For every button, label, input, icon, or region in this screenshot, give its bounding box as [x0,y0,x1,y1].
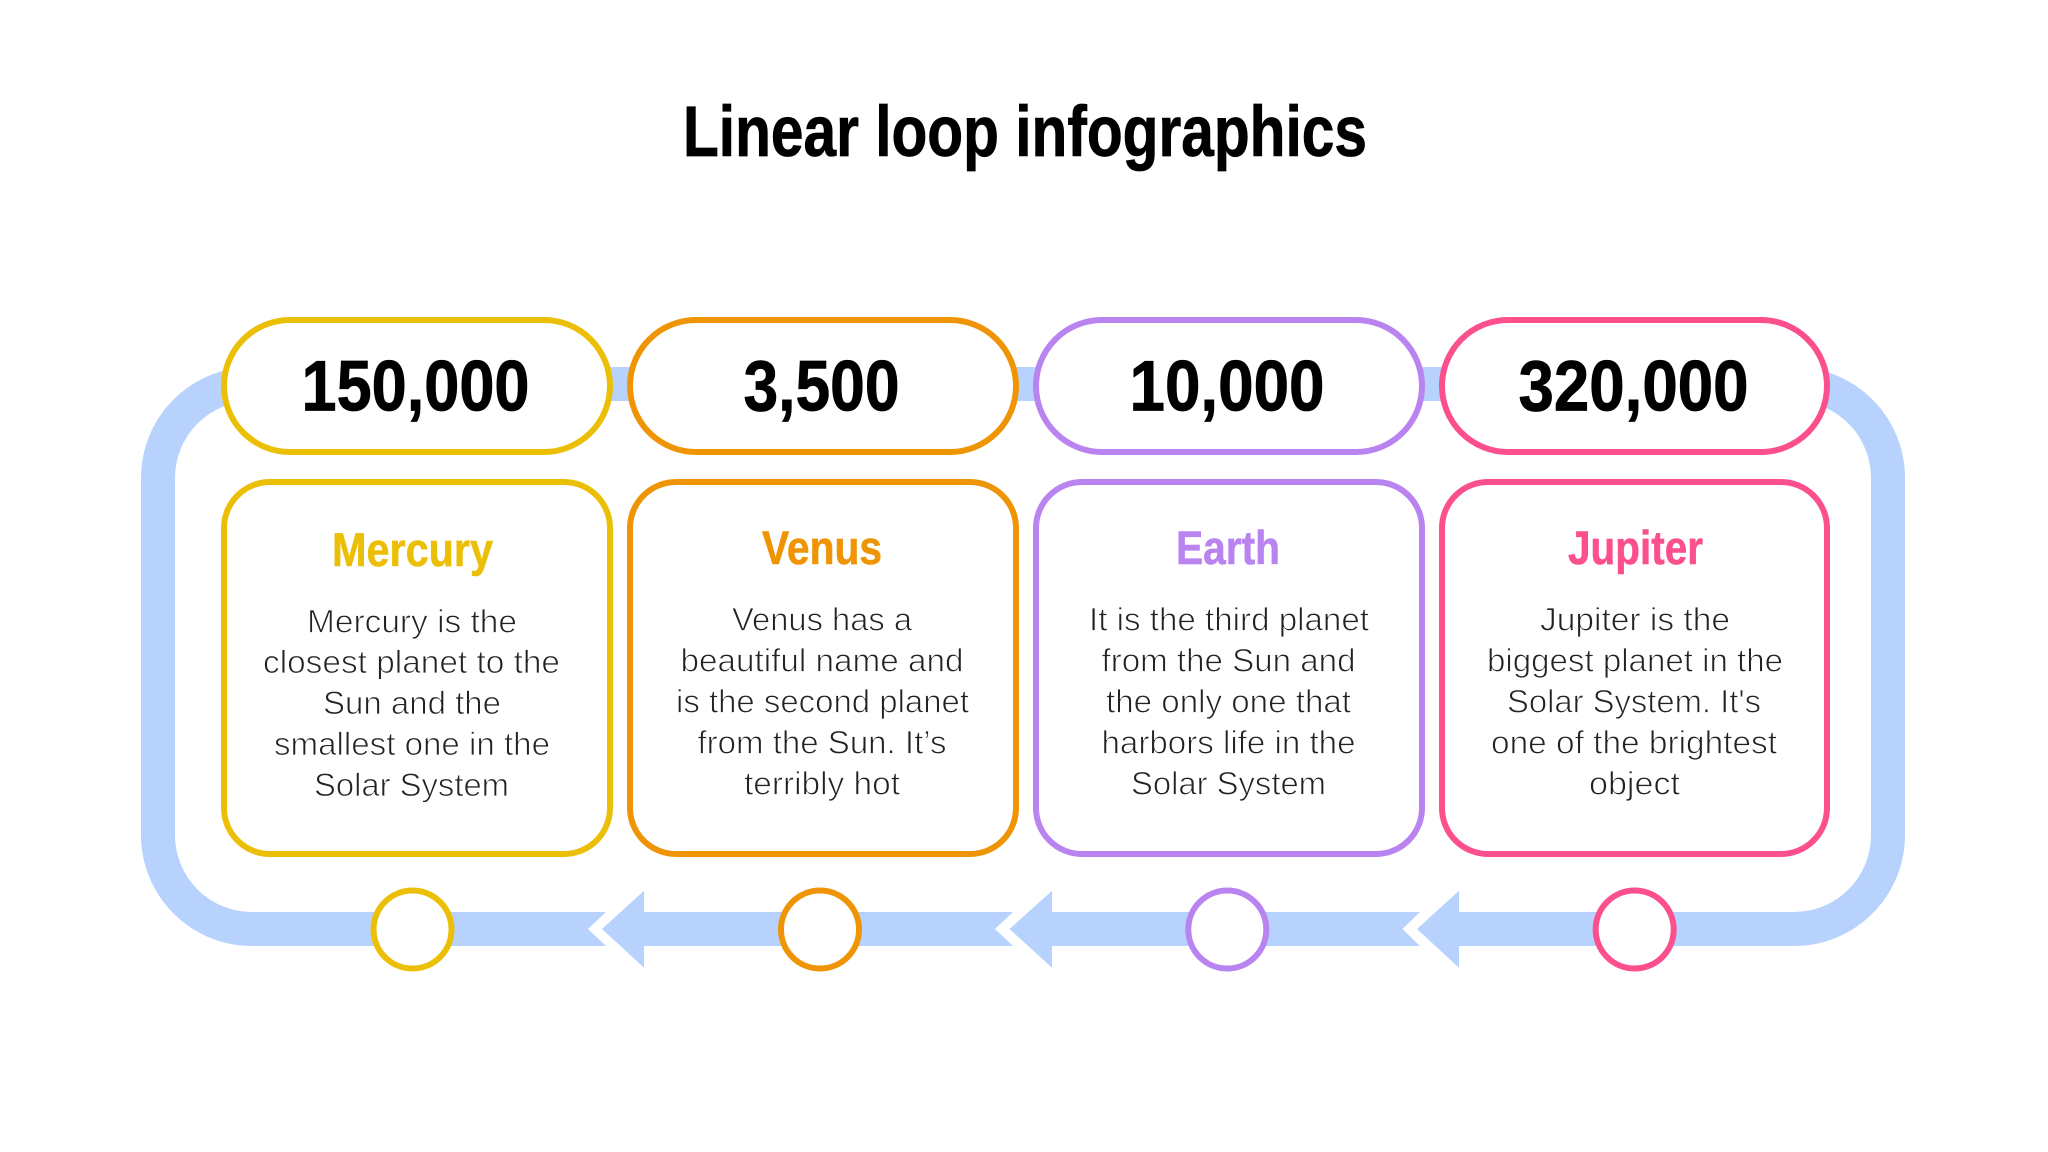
card: Earth: Earth [1176,521,1280,574]
card: Venus: from the Sun. It’s [698,724,946,760]
card: Venus: is the second planet [676,684,969,720]
marker circle: Venus [781,890,859,968]
marker circle: Jupiter [1596,890,1674,968]
panel: Jupiter [1442,320,1827,968]
card: Mercury: smallest one in the [274,726,550,762]
card: Venus: beautiful name and [680,642,964,678]
card: Venus: Venus has a [732,602,912,638]
card: Mercury [224,482,610,854]
card: Mercury: closest planet to the [263,644,560,680]
card: Jupiter: Jupiter is the [1540,602,1730,638]
card: Jupiter: one of the brightest [1491,724,1777,760]
value pill: 150,000: 150,000 [302,348,530,426]
panel: Earth [1036,320,1422,968]
panel: Venus [630,320,1016,968]
card: Mercury: Mercury is the [307,604,517,640]
value pill: 3,500: 3,500 [744,348,900,426]
value pill: 320,000: 320,000 [1518,348,1748,426]
title: Linear loop infographics [683,93,1367,172]
card: Earth: It is the third planet [1089,602,1369,638]
loop band with return arrows [158,384,1888,968]
value pill: 10,000: 10,000 [1130,348,1324,426]
marker circle: Mercury [374,890,452,968]
value pill: 320,000 [1442,320,1827,452]
card: Earth: from the Sun and [1102,642,1356,678]
value pill: 3,500 [630,320,1016,452]
card: Jupiter [1442,482,1827,854]
card: Venus: terribly hot [744,766,900,802]
card: Jupiter: object [1589,766,1680,802]
card: Venus [630,482,1016,854]
card: Mercury: Sun and the [323,685,501,721]
card: Earth: the only one that [1106,684,1351,720]
card: Earth [1036,482,1422,854]
card: Venus: Venus [762,521,882,574]
value pill: 150,000 [224,320,610,452]
card: Earth: Solar System [1131,766,1326,802]
card: Jupiter: Solar System. It's [1507,684,1761,720]
marker circle: Earth [1188,890,1266,968]
card: Jupiter: biggest planet in the [1487,642,1783,678]
panel: Mercury [224,320,610,968]
card: Earth: harbors life in the [1102,724,1356,760]
value pill: 10,000 [1036,320,1422,452]
card: Jupiter: Jupiter [1568,521,1703,574]
card: Mercury: Mercury [332,523,493,576]
card: Mercury: Solar System [314,767,509,803]
